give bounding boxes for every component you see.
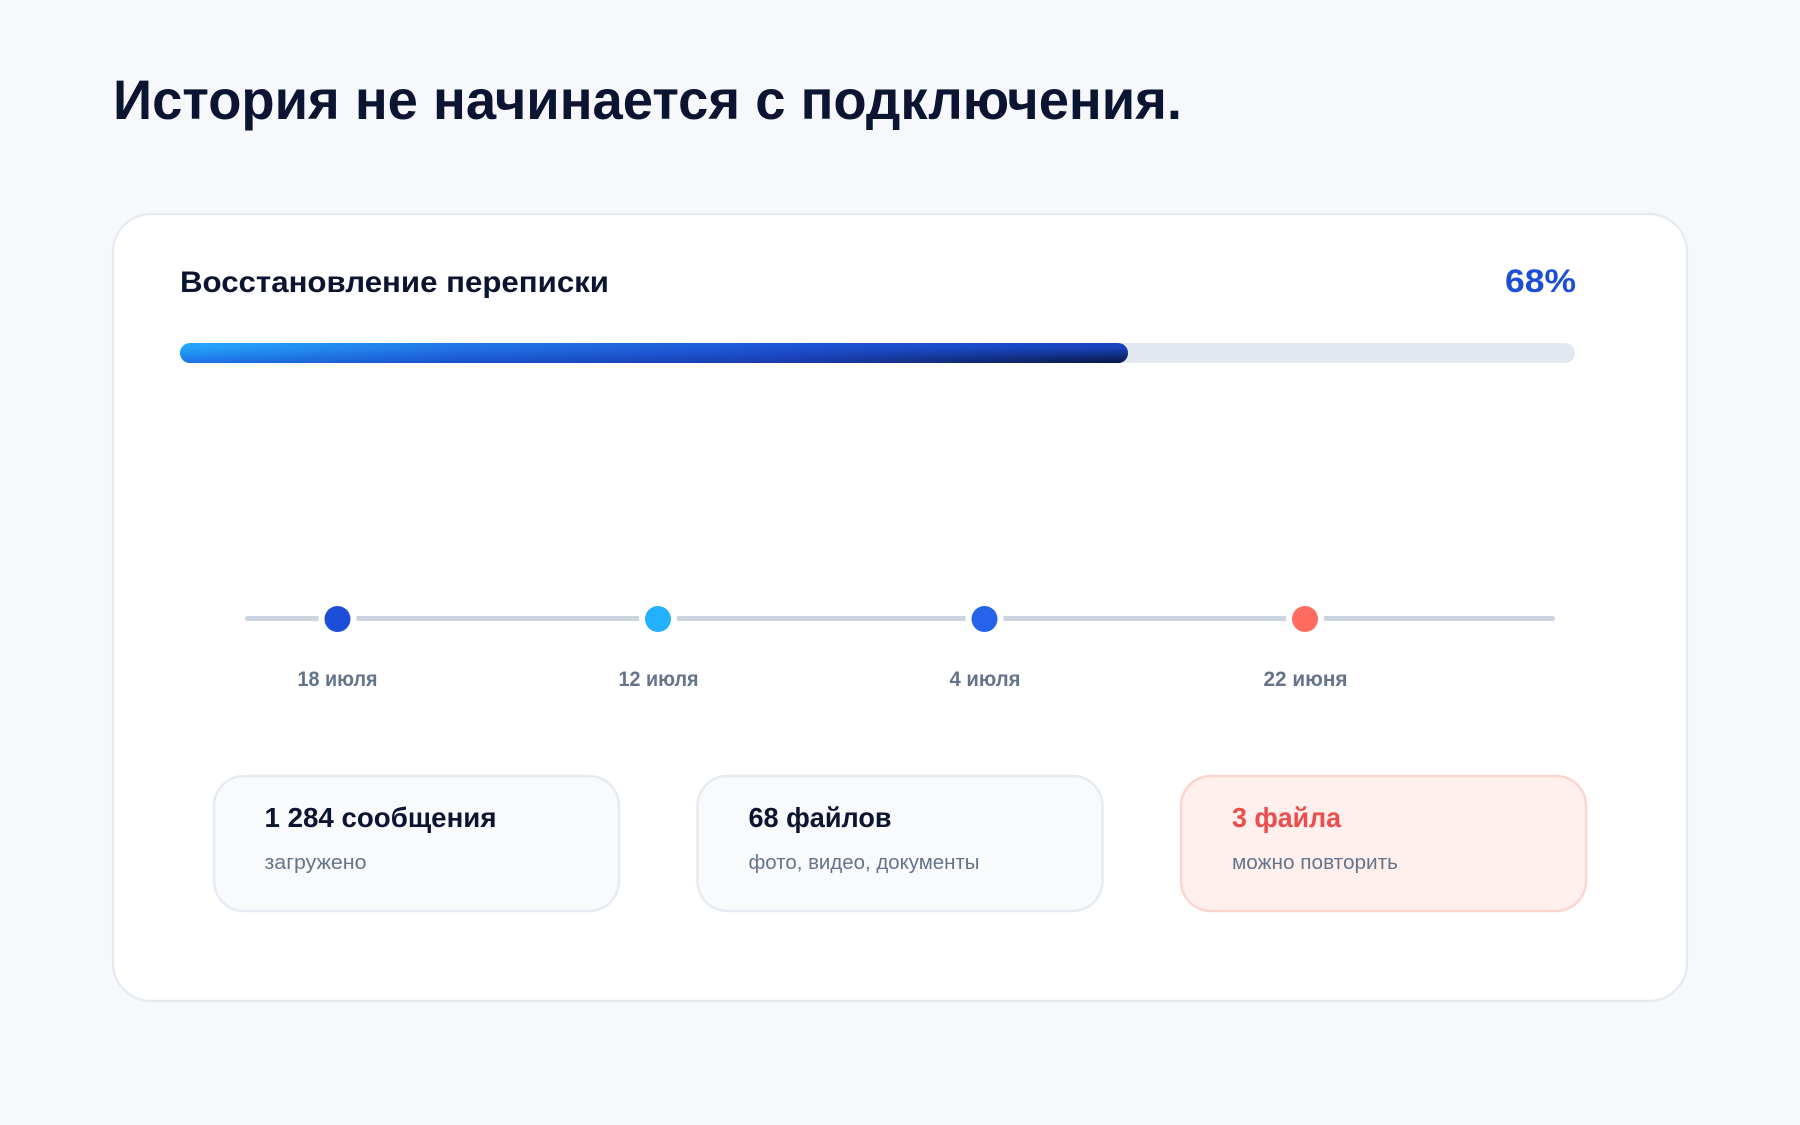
milestone: 18 июля xyxy=(298,600,378,691)
percent value: 68% xyxy=(1505,263,1576,299)
stat card: files: 68 файлов xyxy=(748,802,892,833)
title: История не начинается с подключения. xyxy=(113,68,1182,131)
milestone: 12 июля: 12 июля xyxy=(618,668,698,691)
milestone: 22 июня: 22 июня xyxy=(1264,668,1348,691)
milestone: 12 июля xyxy=(618,600,698,691)
stat card: messages xyxy=(214,776,619,911)
stat card: failed files: 3 файла xyxy=(1232,802,1341,833)
timeline xyxy=(245,600,1555,691)
stat card: failed files xyxy=(1181,776,1586,911)
stat card: messages: 1 284 сообщения xyxy=(264,802,496,833)
milestone: 22 июня xyxy=(1264,600,1348,691)
stat card: failed files: можно повторить xyxy=(1232,852,1398,874)
milestone: 4 июля: 4 июля xyxy=(950,668,1020,691)
milestone: 4 июля xyxy=(950,600,1020,691)
stat card: messages: загружено xyxy=(264,852,366,874)
stat card: files xyxy=(698,776,1102,911)
progress bar xyxy=(180,343,1575,363)
stat card: files: фото, видео, документы xyxy=(748,852,980,874)
panel: restore progress card xyxy=(113,214,1687,1001)
milestone: 18 июля: 18 июля xyxy=(298,668,378,691)
heading: restore: Восстановление переписки xyxy=(180,266,609,299)
